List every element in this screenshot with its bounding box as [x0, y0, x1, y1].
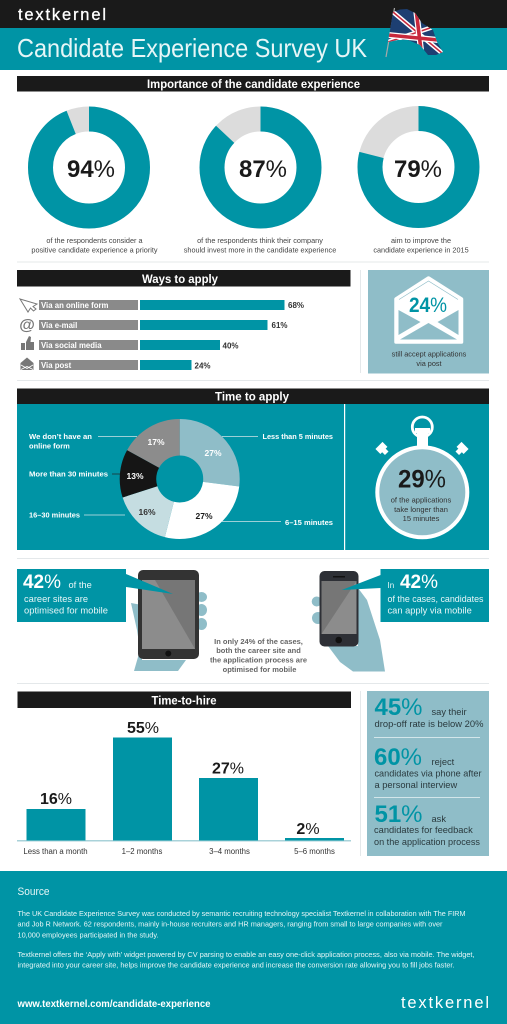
bar chart: 5–6 months	[294, 847, 335, 856]
bar chart: 2%	[296, 821, 320, 838]
panel: key statistics	[367, 691, 489, 856]
donut chart: time to apply	[138, 437, 221, 521]
donut labels: Less than 5 minutes	[262, 432, 333, 441]
icon: cursor	[20, 299, 37, 312]
donut values: 17%	[147, 437, 165, 447]
bar chart: 55%	[127, 720, 159, 737]
donut labels: online form	[29, 442, 70, 450]
bar chart: Less than a month	[23, 847, 88, 856]
section: importance of the candidate experience	[17, 76, 489, 254]
stat 51%: ask	[432, 814, 446, 824]
icon: thumbs up	[21, 336, 34, 350]
donut labels: We don’t have an	[29, 432, 92, 441]
row: online form: 68%	[288, 301, 304, 310]
caption 87%: of the respondents think their company	[197, 236, 323, 245]
website url: www.textkernel.com/candidate-experience	[17, 999, 211, 1010]
stat 45%	[374, 694, 484, 729]
stat 51%: on the application process	[374, 837, 480, 847]
source paragraph 2: Textkernel offers the ‘Apply with’ widget powered by CV parsing to enable an easy one-click application process, also via mobile. The widget,	[18, 950, 474, 959]
stat 60%: a personal interview	[374, 780, 457, 790]
icon: open envelope	[396, 278, 462, 342]
stat 60%: reject	[432, 757, 455, 767]
donut 87%	[212, 119, 309, 216]
row: post	[20, 358, 211, 370]
title: Candidate Experience Survey UK	[17, 33, 368, 63]
source paragraph 1: and Job R Network. 62 respondents, mainly in-house recruiters and HR managers, ranging from small to large companies with over	[18, 920, 443, 928]
callout: career sites: optimised for mobile	[24, 606, 108, 616]
callout: career sites: of the	[68, 580, 92, 590]
callout: career sites: 42%	[23, 572, 61, 593]
caption 94%: positive candidate experience a priority	[31, 246, 158, 254]
row: social media	[21, 336, 239, 350]
bar chart: 27%	[212, 760, 244, 778]
row: online form: Via an online form	[41, 301, 109, 310]
note: both optimised: both the career site and	[216, 646, 301, 655]
donut 79%	[370, 118, 467, 216]
callout: career sites: career sites are	[24, 594, 88, 604]
donut 79%: 79%	[394, 156, 442, 183]
stat 51%	[374, 801, 480, 847]
icon: hand holding phone	[312, 571, 385, 672]
heading bar	[17, 76, 489, 92]
callout: apply via mobile: In	[388, 581, 394, 590]
donut values: 16%	[138, 507, 156, 517]
note: both optimised: optimised for mobile	[223, 665, 296, 674]
section: mobile	[17, 569, 489, 674]
donut 94%: 94%	[67, 156, 115, 183]
callout: apply via mobile: 42%	[400, 572, 438, 593]
donut values: 27%	[195, 511, 213, 521]
bar chart	[17, 720, 351, 856]
callout: apply via mobile	[342, 569, 489, 622]
note: both optimised: the application process are	[210, 656, 307, 664]
icon: envelope	[20, 358, 34, 370]
heading bar: Time to apply	[215, 390, 289, 404]
logo: textkernel: textkernel	[401, 994, 489, 1012]
stat 51%: 51%	[374, 801, 422, 828]
callout panel: post applications: 24%	[409, 294, 447, 317]
donut leader lines	[84, 436, 281, 522]
donut 94%	[40, 119, 138, 216]
donut 87%: 87%	[239, 156, 287, 183]
donut labels: 6–15 minutes	[285, 518, 333, 527]
heading bar: Importance of the candidate experience	[147, 77, 360, 91]
caption 87%: should invest more in the candidate experience	[184, 246, 336, 254]
bar chart: 1–2 months	[122, 847, 162, 856]
heading bar: Ways to apply	[142, 272, 218, 286]
icon: union jack flag	[385, 8, 443, 58]
icon: stopwatch: of the applications	[391, 496, 451, 504]
callout panel: post applications	[368, 270, 489, 374]
caption 79%: aim to improve the	[391, 236, 451, 245]
row: social media: Via social media	[41, 341, 102, 350]
icon: stopwatch: 15 minutes	[403, 514, 440, 523]
bar chart: 16%	[40, 791, 72, 808]
footer: source	[0, 871, 507, 1024]
note: both optimised: In only 24% of the cases,	[214, 637, 303, 646]
heading bar	[17, 270, 350, 286]
bar chart: 3–4 months	[209, 847, 250, 856]
donut labels: 16–30 minutes	[29, 510, 80, 520]
section: time to apply	[17, 388, 489, 550]
header band	[0, 0, 507, 70]
heading bar	[17, 388, 489, 404]
caption 79%: candidate experience in 2015	[373, 246, 469, 254]
source paragraph 2: integrated into your career site, helps improve the candidate experience and increase the conversion rate allowing you to fill jobs faster.	[18, 960, 455, 970]
donut values	[126, 437, 222, 521]
callout: apply via mobile: can apply via mobile	[388, 606, 472, 616]
donut values: 27%	[204, 448, 222, 458]
stat 51%: candidates for feedback	[374, 825, 473, 835]
heading bar: Time-to-hire	[152, 694, 217, 708]
stat 60%: 60%	[374, 744, 422, 771]
icon: at sign: @	[19, 317, 35, 334]
row: social media: 40%	[222, 342, 239, 350]
stat 45%: say their	[432, 707, 467, 717]
row: e-mail	[19, 317, 288, 334]
row: e-mail: Via e-mail	[41, 321, 77, 330]
source paragraph 1: 10,000 employees participated in the study.	[18, 930, 159, 940]
row: post: Via post	[41, 361, 72, 370]
row: online form	[20, 299, 304, 312]
donut values: 13%	[126, 471, 144, 481]
stat 45%: 45%	[374, 694, 422, 721]
callout panel: post applications: still accept applications	[392, 350, 467, 358]
stat 60%: candidates via phone after	[374, 768, 482, 778]
callout: apply via mobile: of the cases, candidates	[388, 594, 484, 604]
row: post: 24%	[194, 362, 211, 370]
stat 60%	[374, 744, 482, 790]
source heading: Source	[18, 886, 50, 898]
heading bar	[18, 692, 351, 708]
callout panel: post applications: via post	[416, 359, 442, 368]
section: ways to apply	[17, 270, 489, 374]
callout: career sites	[17, 569, 173, 622]
logo: textkernel: textkernel	[18, 6, 106, 24]
caption 94%: of the respondents consider a	[46, 236, 144, 245]
icon: hand holding tablet	[131, 570, 207, 671]
donut labels	[29, 432, 333, 527]
row: e-mail: 61%	[272, 321, 288, 330]
source paragraph 1: The UK Candidate Experience Survey was conducted by semantic recruiting technology specialist Textkernel in collaboration with The FIRM	[18, 909, 466, 918]
section: time-to-hire	[17, 691, 489, 856]
icon: stopwatch: take longer than	[394, 505, 448, 514]
icon: stopwatch: 29%	[398, 466, 446, 494]
icon: stopwatch	[375, 417, 469, 537]
donut labels: More than 30 minutes	[29, 470, 108, 478]
stat 45%: drop-off rate is below 20%	[374, 719, 484, 729]
